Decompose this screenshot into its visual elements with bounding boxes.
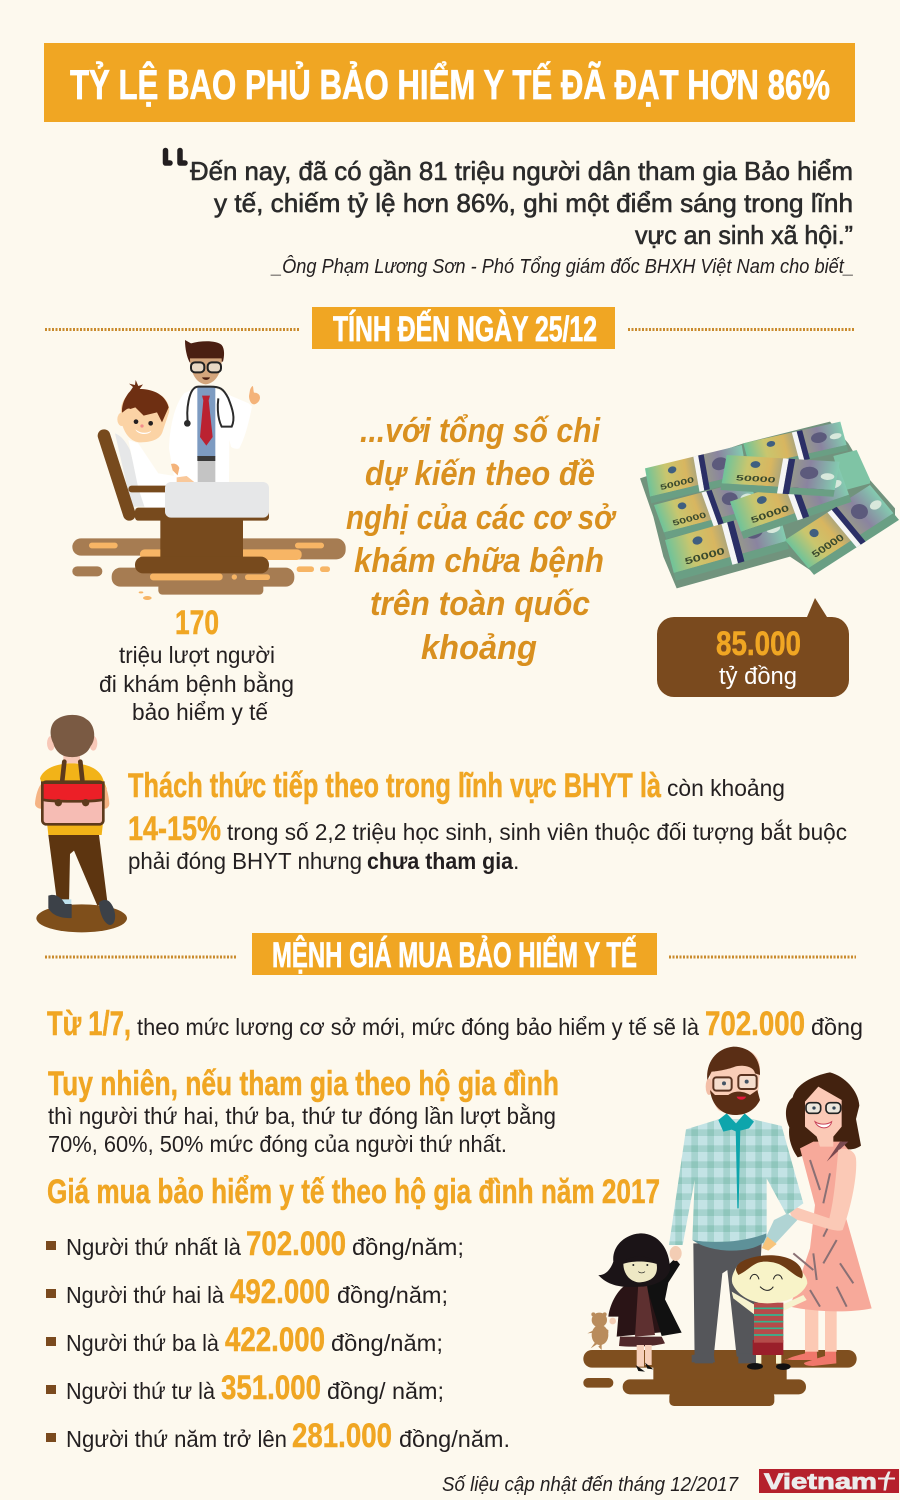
row 5: đồng/năm. (399, 1426, 510, 1452)
section heading: date (312, 307, 615, 349)
illustration: banknote stacks (640, 422, 899, 588)
logo: Vietnam+ (759, 1469, 899, 1494)
illustration: banknote stacks: 50000 (810, 532, 847, 560)
text: challenge: phải đóng BHYT nhưng (128, 848, 362, 874)
text: total expenditure (346, 412, 617, 667)
row 3 (46, 1321, 443, 1359)
row 4: 351.000 (221, 1369, 321, 1407)
row 3: đồng/năm; (331, 1330, 443, 1356)
boy (732, 1255, 807, 1370)
doctor (169, 340, 260, 483)
ground (583, 1350, 857, 1406)
text: challenge (128, 767, 847, 874)
icon: quotation mark (166, 150, 185, 163)
row 4 (46, 1369, 444, 1407)
row 4: đồng/ năm; (327, 1378, 444, 1404)
row 1: Người thứ nhất là (66, 1234, 241, 1260)
row 5: Người thứ năm trở lên (66, 1426, 287, 1452)
illustration: doctor and patient (72, 340, 346, 600)
text: challenge: . (513, 848, 519, 874)
text: total expenditure: dự kiến theo đề (365, 455, 595, 493)
title banner (44, 43, 855, 122)
illustration: banknote stacks: 50000 (750, 504, 791, 526)
text: challenge: Thách thức tiếp theo trong lĩnh vực BHYT là (128, 767, 661, 805)
text: people count: triệu lượt người (119, 642, 275, 668)
row 2: Người thứ hai là (66, 1282, 224, 1308)
text: from July 1: theo mức lương cơ sở mới, mức đóng bảo hiểm y tế sẽ là (137, 1014, 699, 1040)
row 2 (46, 1273, 448, 1311)
text: family participation (48, 1065, 559, 1157)
row 1 (46, 1225, 464, 1263)
text: total expenditure: nghị của các cơ sở (346, 499, 617, 537)
text: total expenditure: trên toàn quốc (370, 585, 590, 623)
text: from July 1: 702.000 (705, 1005, 805, 1043)
text: total expenditure: ...với tổng số chi (360, 412, 601, 450)
text: family participation: thì người thứ hai, thứ ba, thứ tư đóng lần lượt bằng (48, 1103, 556, 1129)
quote block: y tế, chiếm tỷ lệ hơn 86%, ghi một điểm sáng trong lĩnh (214, 188, 853, 218)
quote block (166, 150, 854, 278)
price list (46, 1225, 510, 1455)
heading: family prices 2017: Giá mua bảo hiểm y tế theo hộ gia đình năm 2017 (47, 1173, 660, 1211)
row 1: đồng/năm; (352, 1234, 464, 1260)
row 5: 281.000 (292, 1417, 392, 1455)
section heading: date: TÍNH ĐẾN NGÀY 25/12 (333, 309, 597, 349)
text: challenge: trong số 2,2 triệu học sinh, sinh viên thuộc đối tượng bắt buộc (227, 819, 847, 845)
section heading: price: MỆNH GIÁ MUA BẢO HIỂM Y TẾ (272, 935, 637, 975)
illustration: banknote stacks: 50000 (735, 474, 777, 485)
text: challenge: còn khoảng (667, 775, 785, 801)
quote block: Đến nay, đã có gần 81 triệu người dân tham gia Bảo hiểm (190, 156, 853, 186)
text: people count (99, 604, 294, 725)
text: people count: đi khám bệnh bằng (99, 671, 294, 697)
text: challenge: 14-15% (128, 810, 221, 848)
illustration: family (583, 1047, 872, 1406)
chair and patient (104, 380, 269, 573)
row 2: đồng/năm; (337, 1282, 448, 1308)
row 3: Người thứ ba là (66, 1330, 219, 1356)
text: people count: bảo hiểm y tế (132, 699, 268, 725)
text: from July 1 (47, 1005, 863, 1043)
text: from July 1: đồng (811, 1014, 863, 1040)
quote block: vực an sinh xã hội.” (635, 220, 853, 250)
quote block: _Ông Phạm Lương Sơn - Phó Tổng giám đốc BHXH Việt Nam cho biết_ (270, 255, 854, 278)
teddy bear (587, 1312, 608, 1350)
text: total expenditure: khoảng (421, 629, 537, 667)
illustration: banknote stacks: 50000 (671, 510, 708, 528)
row 3: 422.000 (225, 1321, 325, 1359)
illustration: banknote stacks: 50000 (684, 546, 726, 567)
text: from July 1: Từ 1/7, (47, 1005, 131, 1043)
footer note: Số liệu cập nhật đến tháng 12/2017 (442, 1474, 739, 1496)
callout: 85.000 tỷ đồng (657, 598, 849, 697)
girl with teddy bear (587, 1233, 682, 1372)
row 4: Người thứ tư là (66, 1378, 215, 1404)
row 5 (46, 1417, 510, 1455)
callout: 85.000 tỷ đồng: 85.000 (716, 625, 801, 663)
text: family participation: Tuy nhiên, nếu tham gia theo hộ gia đình (48, 1065, 559, 1103)
text: family participation: 70%, 60%, 50% mức đóng của người thứ nhất. (48, 1131, 507, 1157)
text: total expenditure: khám chữa bệnh (354, 542, 604, 580)
father (669, 1047, 803, 1363)
text: challenge: chưa tham gia (367, 848, 513, 874)
illustration: banknote stacks: 50000 (659, 475, 695, 492)
logo: Vietnam+: Vietnam (764, 1469, 877, 1494)
text: people count: 170 (175, 604, 219, 642)
section heading: price (252, 933, 657, 975)
mother (785, 1072, 872, 1366)
callout: 85.000 tỷ đồng: tỷ đồng (719, 663, 797, 690)
illustration: student with backpack (35, 715, 127, 932)
row 2: 492.000 (230, 1273, 330, 1311)
row 1: 702.000 (246, 1225, 346, 1263)
